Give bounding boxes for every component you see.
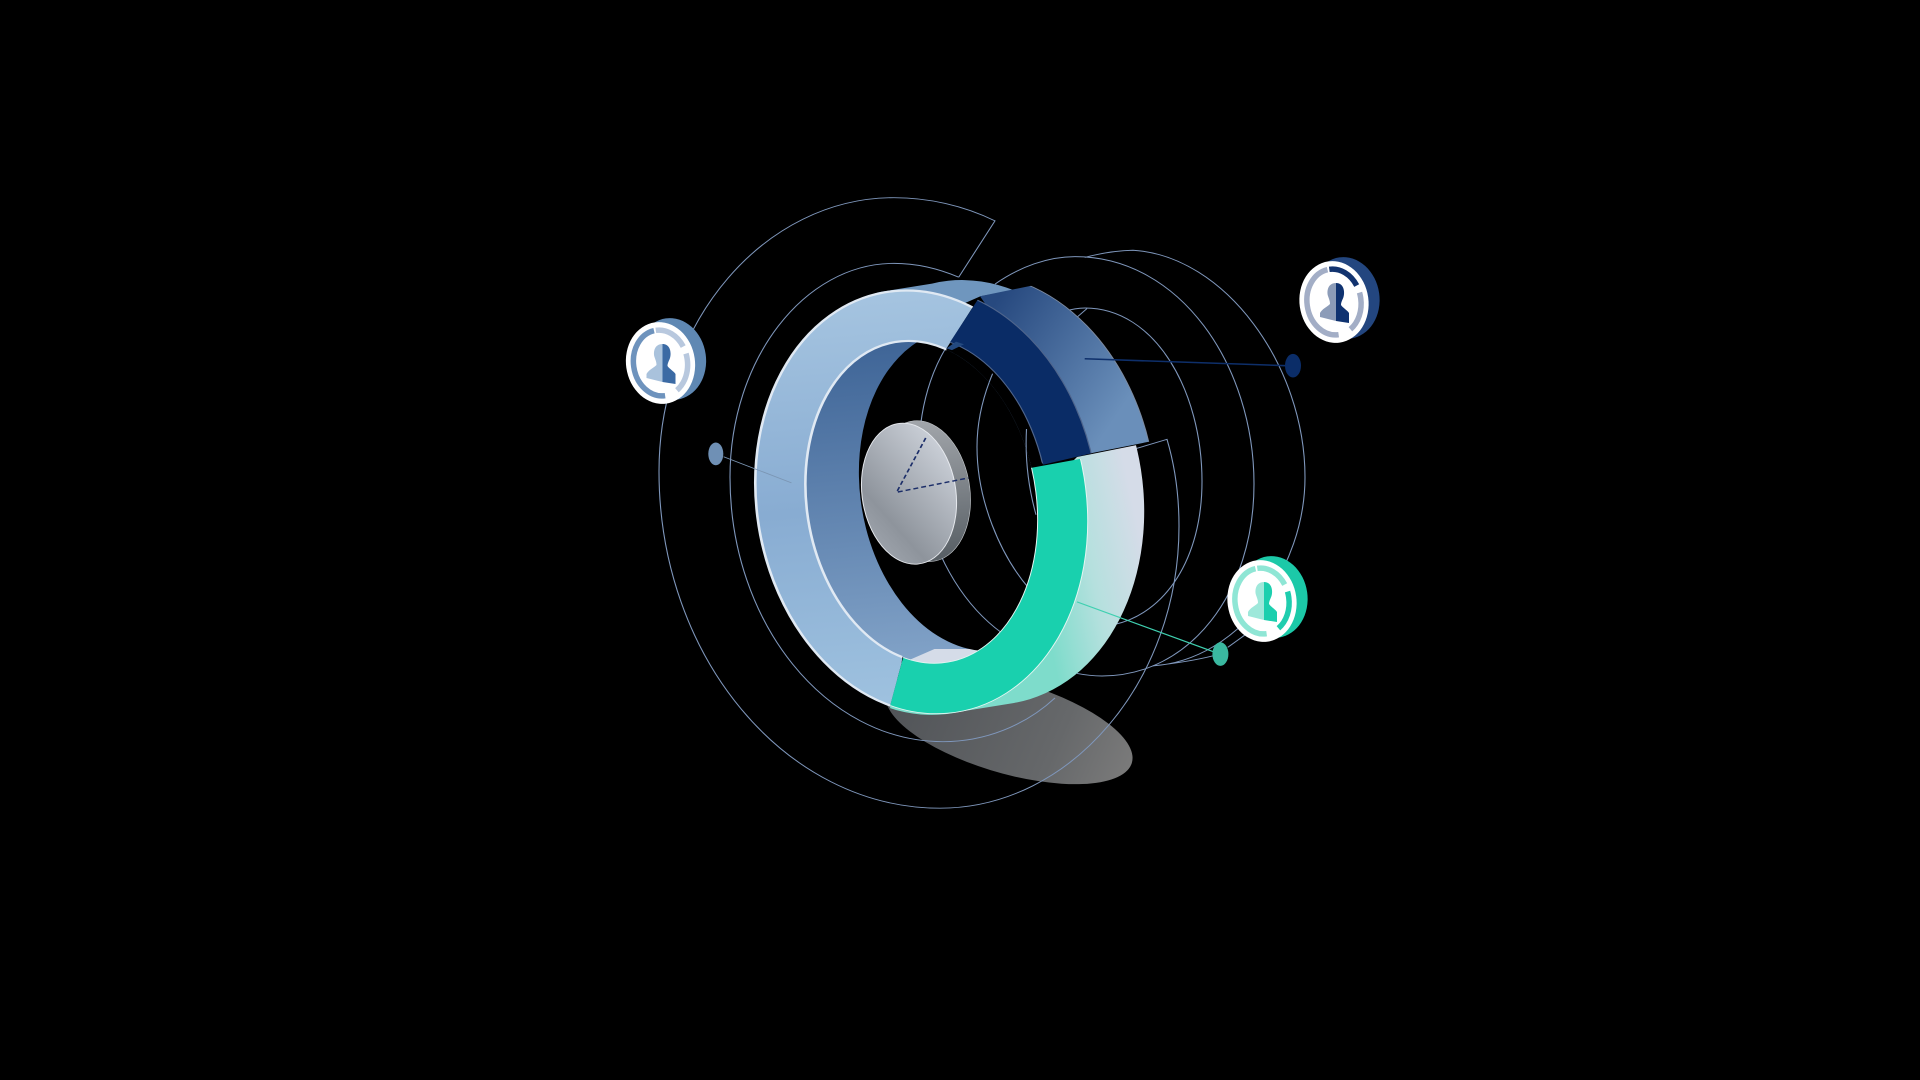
ring outer wall: light segment	[890, 445, 1144, 715]
segment: teal face	[890, 458, 1088, 714]
central disc	[853, 417, 979, 568]
ring outer wall: blue segment	[876, 280, 1012, 303]
dot: navy	[1285, 354, 1301, 377]
segment: light blue face	[754, 289, 973, 706]
arcs seen through the hole	[920, 350, 1036, 632]
coin: blue	[621, 314, 711, 408]
navy inner sliver	[946, 342, 964, 350]
ring diagram	[659, 198, 1305, 808]
navy face	[950, 300, 1092, 464]
ring shadow	[868, 647, 1150, 808]
coin: navy	[1294, 253, 1385, 347]
disc face	[853, 419, 965, 568]
segment: navy, exploded outward	[946, 286, 1150, 464]
ring inner wall	[787, 331, 1056, 673]
thin outline arcs	[659, 198, 1305, 808]
dot: teal	[1212, 642, 1228, 666]
leader: blue	[708, 442, 792, 483]
leader: navy	[1085, 354, 1301, 377]
dashed radii	[897, 438, 968, 492]
coin: teal	[1222, 552, 1313, 646]
navy outer wall	[980, 286, 1150, 454]
ring hole	[858, 342, 1038, 650]
leader: teal	[1077, 602, 1228, 666]
dot: blue	[708, 442, 723, 465]
inner wall light bottom	[910, 649, 978, 663]
disc side	[867, 417, 979, 566]
